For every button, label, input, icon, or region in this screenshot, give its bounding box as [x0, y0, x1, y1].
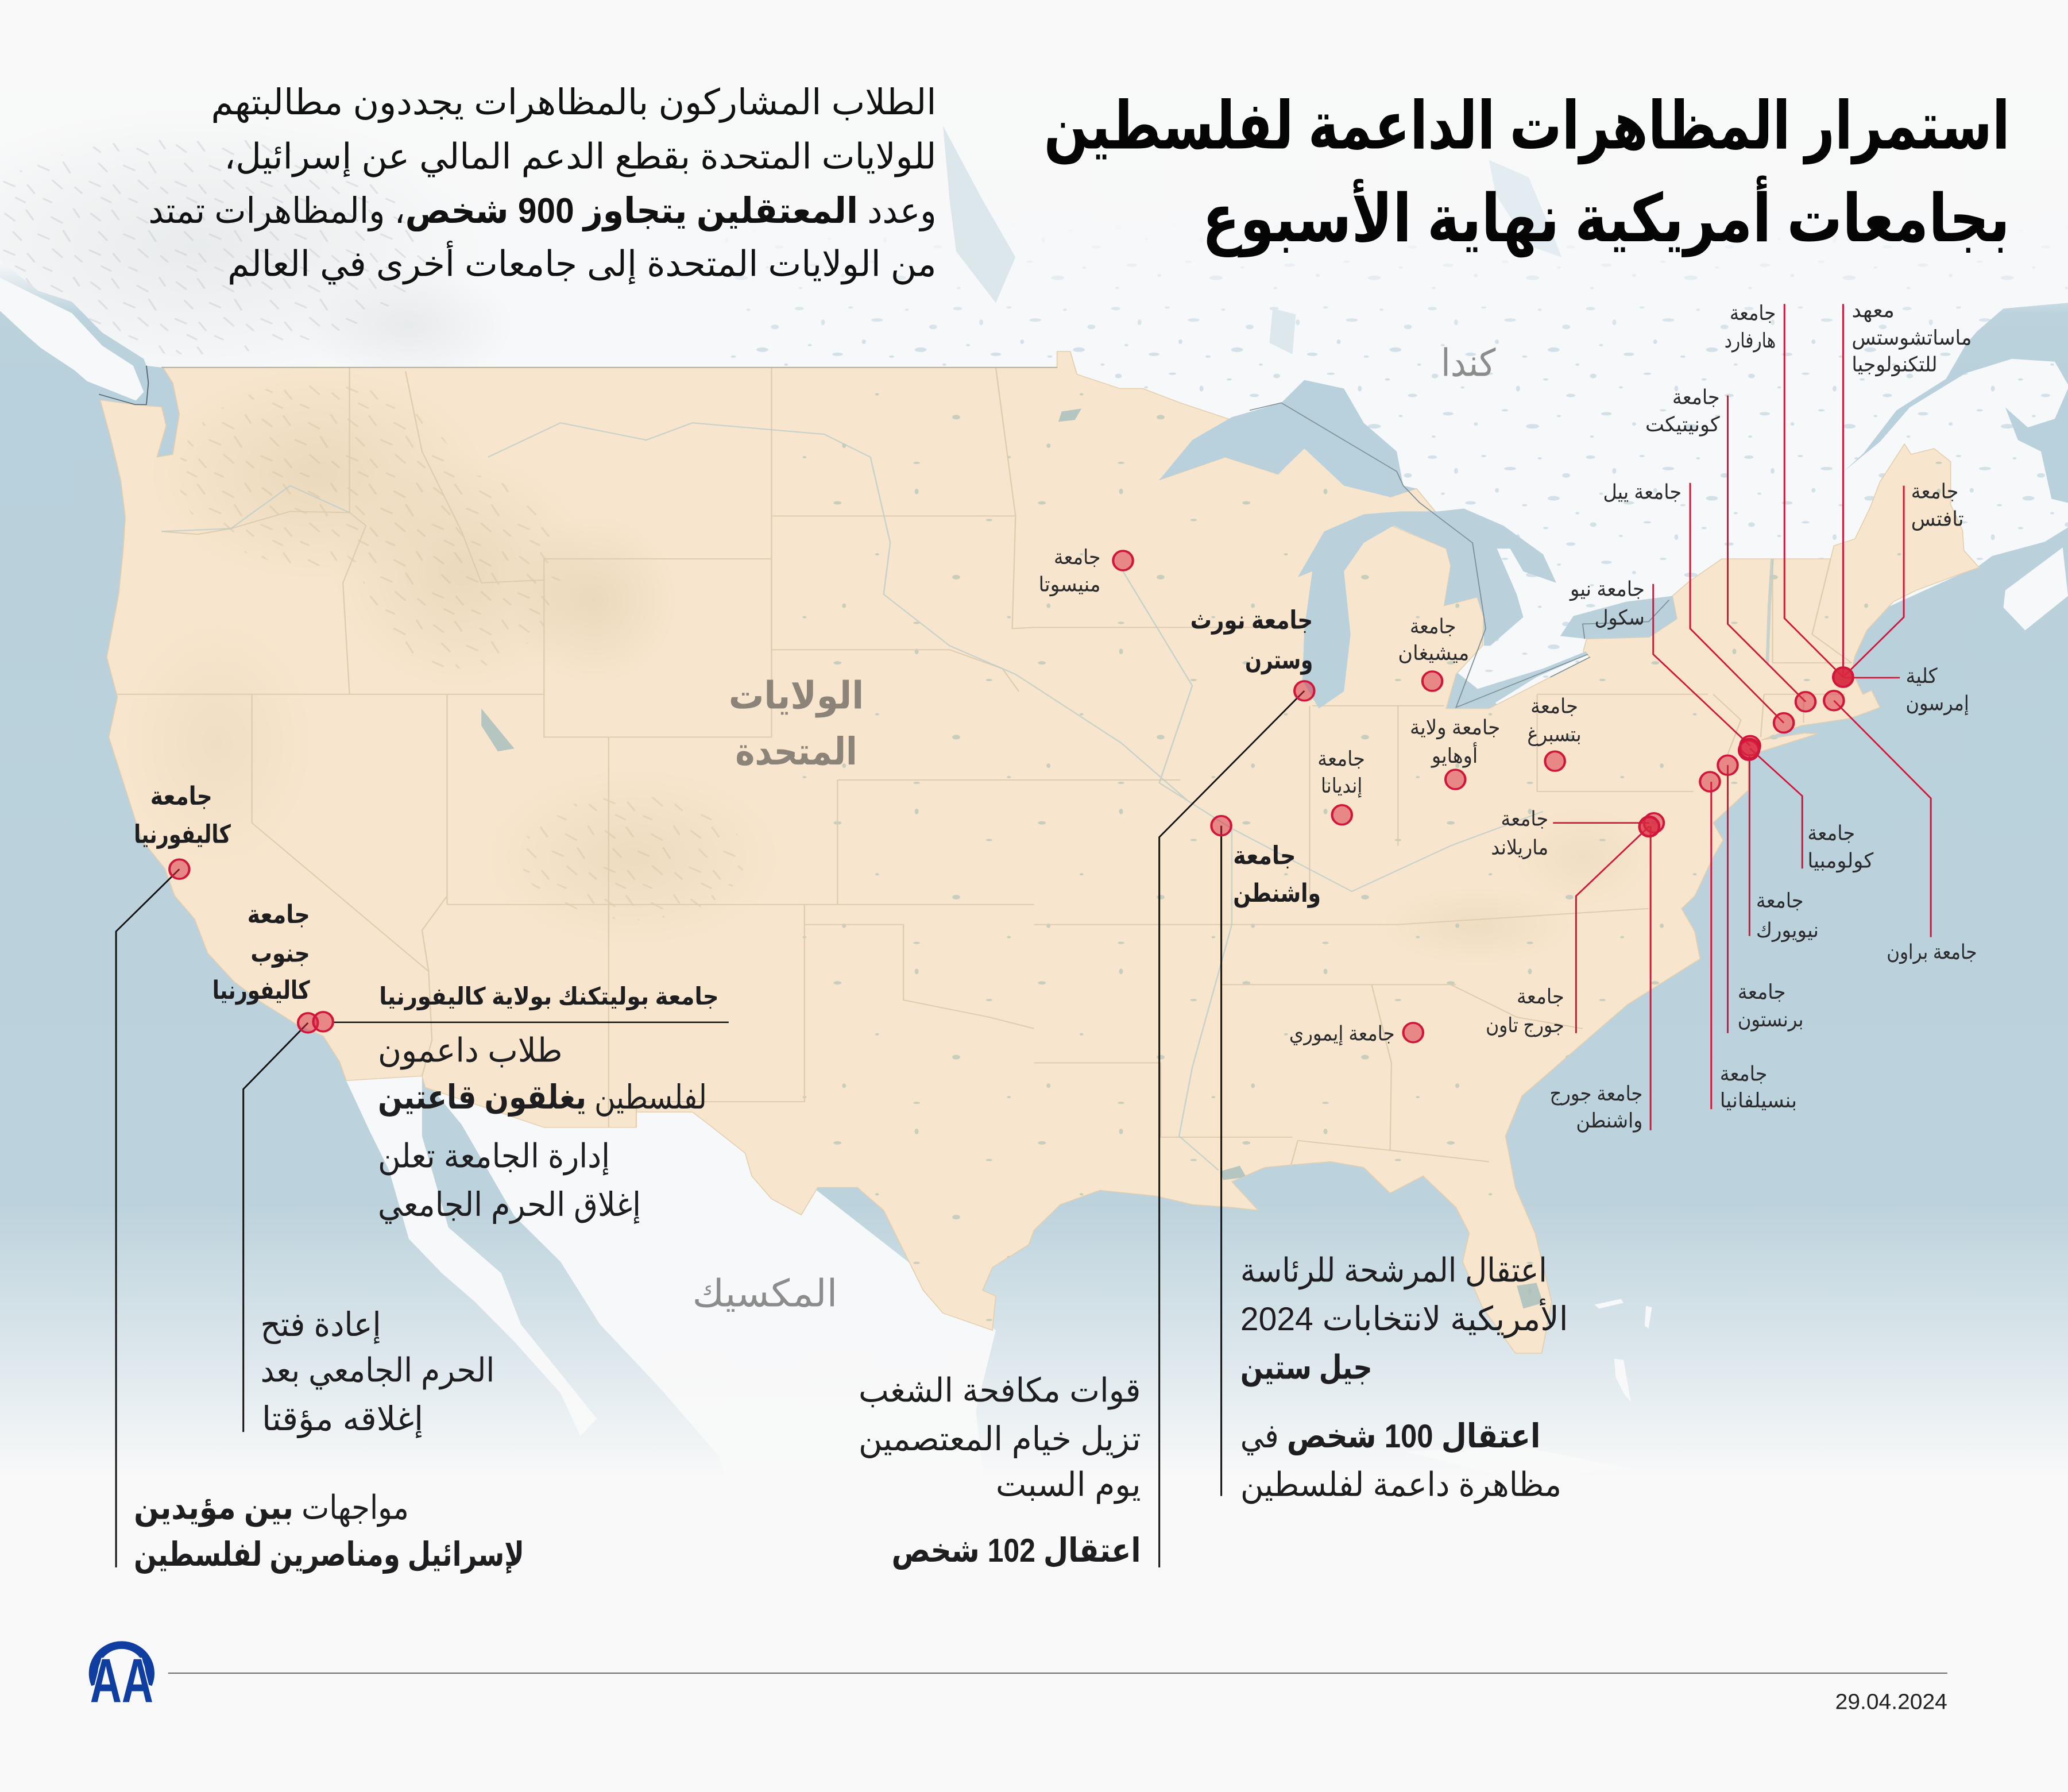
footer rule	[168, 1673, 1947, 1674]
highlighted label: University of Southern California: كاليفورنيا	[212, 976, 310, 1005]
highlighted label: University of California: كاليفورنيا	[134, 821, 231, 849]
university labels: سكول	[1595, 607, 1645, 630]
university labels: جامعة جورج	[1549, 1083, 1642, 1106]
university labels: جامعة	[1911, 480, 1958, 503]
callout: Cal Poly	[378, 983, 719, 1225]
university markers	[169, 551, 1853, 1042]
callout: Washington University arrests: جيل ستين	[1240, 1350, 1373, 1387]
university labels: ماريلاند	[1491, 836, 1548, 859]
university labels: ماساتشوستس	[1851, 326, 1972, 350]
university labels: بتسبرغ	[1527, 723, 1582, 747]
callout: Northwestern arrests: قوات مكافحة الشغب	[859, 1373, 1141, 1409]
callout: Washington University arrests: اعتقال المرشحة للرئاسة	[1240, 1253, 1547, 1289]
country label: Mexico: المكسيك	[693, 1273, 837, 1315]
university labels: إنديانا	[1321, 774, 1362, 798]
map: United States	[100, 352, 2068, 1395]
subtitle text block: وعدد المعتقلين يتجاوز 900 شخص، والمظاهرات تمتد	[148, 191, 937, 232]
callout: Cal Poly: إغلاق الحرم الجامعي	[378, 1187, 641, 1225]
subtitle text block: الطلاب المشاركون بالمظاهرات يجددون مطالبتهم	[211, 83, 937, 123]
map: Canada land	[0, 126, 2068, 704]
callout: Cal Poly: لفلسطين يغلقون قاعتين	[378, 1079, 707, 1117]
callout: Cal Poly: إدارة الجامعة تعلن	[378, 1138, 610, 1176]
country label: United States	[729, 675, 864, 773]
highlighted label: Northwestern University: جامعة نورث	[1190, 606, 1313, 635]
callout: Cal Poly: جامعة بوليتكنك بولاية كاليفورنيا	[379, 983, 719, 1010]
university labels: إمرسون	[1906, 692, 1969, 716]
country label: United States: المتحدة	[735, 731, 857, 773]
highlighted label: University of Southern California	[212, 901, 310, 1005]
university labels: واشنطن	[1576, 1109, 1642, 1133]
university labels: كلية	[1906, 665, 1938, 688]
highlighted label: University of California	[134, 782, 231, 849]
callout: USC campus reopened: إعادة فتح	[261, 1307, 381, 1345]
university labels: جامعة	[1807, 822, 1855, 845]
university labels: ميشيغان	[1398, 642, 1469, 665]
highlighted label: Washington University	[1233, 841, 1321, 908]
callout: UC clashes: مواجهات بين مؤيدين	[134, 1490, 409, 1527]
callout: Northwestern arrests: اعتقال 102 شخص	[891, 1532, 1141, 1570]
university labels: جامعة	[1410, 615, 1456, 638]
subtitle text block: من الولايات المتحدة إلى جامعات أخرى في العالم	[227, 240, 937, 285]
callout: Washington University arrests	[1240, 1253, 1568, 1504]
map: Gulf of St. Lawrence	[1844, 303, 2068, 503]
university labels: جامعة	[1530, 695, 1578, 718]
university labels: جامعة إيموري	[1289, 1022, 1395, 1046]
university labels: جامعة	[1672, 386, 1720, 409]
university labels: جامعة	[1756, 889, 1804, 912]
callout: USC campus reopened: الحرم الجامعي بعد	[261, 1353, 494, 1390]
icon: Anadolu Agency logo	[90, 1645, 153, 1715]
highlighted label: University of California: جامعة	[150, 782, 212, 810]
callout: Washington University arrests: الأمريكية لانتخابات 2024	[1240, 1299, 1568, 1338]
callout: Washington University arrests: مظاهرة داعمة لفلسطين	[1240, 1467, 1561, 1504]
highlighted label: Washington University: جامعة	[1233, 841, 1296, 870]
university labels: هارفارد	[1725, 329, 1776, 352]
university labels: جامعة نيو	[1569, 578, 1645, 601]
university labels: كولومبيا	[1807, 849, 1874, 873]
callout: Northwestern arrests: يوم السبت	[996, 1467, 1141, 1504]
icon: Anadolu Agency logo: AA	[90, 1646, 153, 1715]
highlighted label: University of Southern California: جنوب	[250, 940, 310, 968]
callout: USC campus reopened	[261, 1307, 494, 1439]
university labels: جامعة ييل	[1603, 481, 1682, 504]
university labels: تافتس	[1911, 508, 1964, 531]
country label: Canada: كندا	[1441, 342, 1495, 384]
university labels: معهد	[1851, 299, 1895, 322]
red leader lines	[1553, 304, 1931, 1130]
callout: Washington University arrests: اعتقال 100 شخص في	[1240, 1418, 1540, 1456]
callout: UC clashes	[134, 1490, 524, 1574]
highlighted label: Northwestern University	[1190, 606, 1313, 675]
highlighted label: University of Southern California: جامعة	[248, 901, 310, 929]
subtitle text block: للولايات المتحدة بقطع الدعم المالي عن إسرائيل،	[224, 137, 937, 177]
title	[1044, 89, 2010, 258]
subtitle text block	[148, 83, 937, 285]
university labels: جامعة	[1730, 302, 1776, 325]
university labels	[1039, 299, 1977, 1133]
university labels: جامعة براون	[1887, 941, 1977, 964]
country label: United States: الولايات	[729, 675, 864, 717]
university labels: جامعة	[1517, 986, 1564, 1008]
university labels: جامعة	[1317, 748, 1365, 770]
university labels: أوهايو	[1431, 742, 1478, 768]
university labels: جامعة ولاية	[1410, 716, 1500, 740]
date: 29.04.2024	[1835, 1689, 1947, 1714]
university labels: بنسيلفانيا	[1720, 1090, 1797, 1112]
university labels: جورج تاون	[1486, 1014, 1564, 1037]
black leader lines	[116, 691, 1304, 1567]
callout: Northwestern arrests: تزيل خيام المعتصمين	[859, 1421, 1141, 1458]
university labels: جامعة	[1720, 1063, 1767, 1086]
ocean	[0, 229, 2068, 1543]
callout: Cal Poly: طلاب داعمون	[378, 1033, 562, 1069]
callout: UC clashes: لإسرائيل ومناصرين لفلسطين	[134, 1536, 524, 1574]
university labels: جامعة	[1501, 808, 1548, 831]
university labels: جامعة	[1054, 546, 1100, 569]
university labels: برنستون	[1738, 1008, 1804, 1032]
highlighted label: Washington University: واشنطن	[1233, 879, 1321, 908]
map: Great Lakes	[1159, 380, 1677, 709]
highlighted label: Northwestern University: وسترن	[1245, 646, 1313, 675]
callout: Northwestern arrests	[859, 1373, 1141, 1570]
map: Mexico land	[346, 1067, 1652, 1524]
university labels: نيويورك	[1756, 919, 1819, 943]
university labels: للتكنولوجيا	[1851, 353, 1938, 377]
callout: USC campus reopened: إغلاقه مؤقتا	[262, 1401, 423, 1439]
university labels: جامعة	[1738, 981, 1786, 1003]
university labels: كونيتيكت	[1645, 414, 1720, 437]
university labels: منيسوتا	[1039, 573, 1100, 597]
